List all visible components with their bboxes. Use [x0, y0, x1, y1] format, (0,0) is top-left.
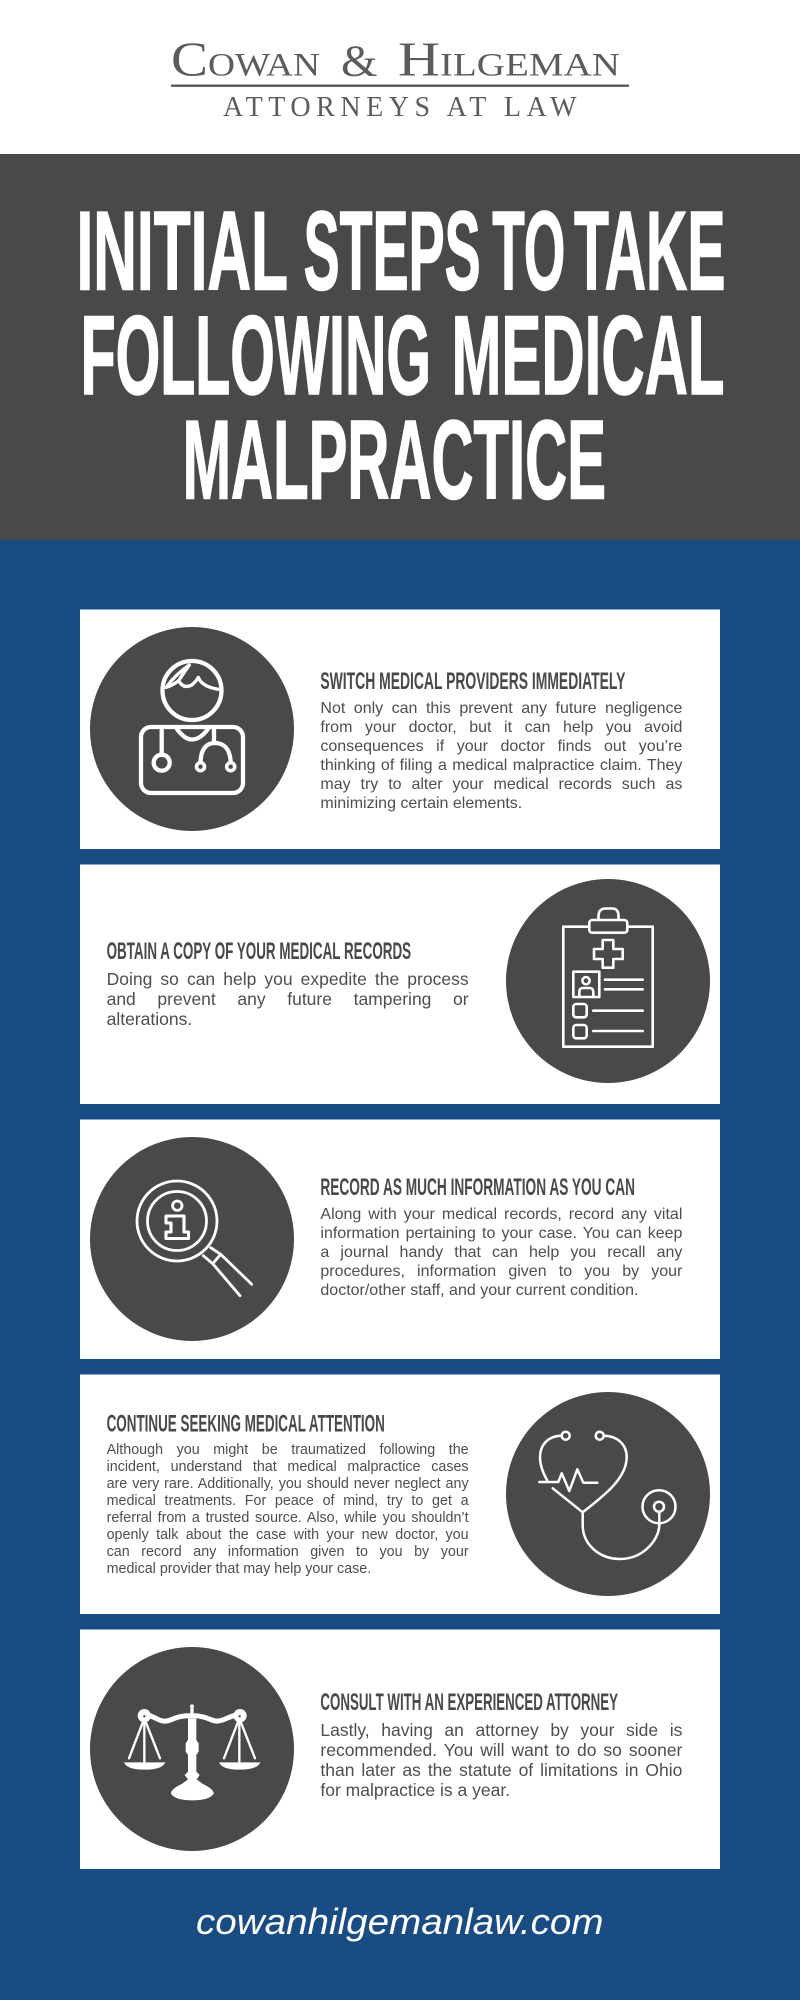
logo: Cowan & Hilgeman Attorneys at Law: &	[341, 36, 378, 86]
panel: consult an attorney	[80, 1629, 720, 1869]
body text: openly talk about the case with your new doctor, you	[107, 1526, 469, 1542]
title: Initial Steps to Take Following Medical Malpractice: FOLLOWING	[81, 293, 431, 418]
body text: referral from a trusted source. Also, while you shouldn’t	[107, 1510, 469, 1526]
logo: Cowan & Hilgeman Attorneys at Law	[171, 32, 629, 123]
body text: medical treatments. For peace of mind, try to get a	[107, 1492, 469, 1508]
icon: doctor	[90, 627, 294, 831]
body text: than later as the statute of limitations in Ohio	[320, 1760, 682, 1780]
title: Initial Steps to Take Following Medical Malpractice: STEPS	[304, 188, 481, 314]
body text: recommended. You will want to do so sooner	[320, 1740, 682, 1760]
body text: can record any information given to you by your	[107, 1544, 469, 1560]
body text: for malpractice is a year.	[320, 1780, 510, 1800]
body text: alterations.	[107, 1009, 192, 1029]
title band	[0, 154, 800, 540]
body text: Lastly, having an attorney by your side is	[320, 1720, 682, 1740]
body text: thinking of filing a medical malpractice claim. They	[320, 757, 682, 774]
body text: consequences if your doctor finds out you’re	[320, 738, 682, 755]
logo: Cowan & Hilgeman Attorneys at Law: HILGEMAN	[398, 32, 620, 86]
footer: website: cowanhilgemanlaw.com	[196, 1901, 604, 1942]
logo: Cowan & Hilgeman Attorneys at Law: ATTORNEYS AT LAW	[223, 92, 577, 123]
panel: obtain medical records	[80, 864, 720, 1104]
title: Initial Steps to Take Following Medical Malpractice	[76, 188, 726, 522]
logo: Cowan & Hilgeman Attorneys at Law: COWAN	[171, 32, 320, 86]
body text: Along with your medical records, record any vital	[320, 1206, 682, 1223]
body text: Although you might be traumatized following the	[107, 1442, 469, 1458]
heading: CONTINUE SEEKING MEDICAL ATTENTION	[107, 1411, 385, 1438]
body text: information pertaining to your case. You can keep	[320, 1225, 682, 1242]
heading: OBTAIN A COPY OF YOUR MEDICAL RECORDS	[107, 938, 411, 965]
body text	[107, 969, 469, 1029]
body text	[320, 700, 682, 812]
body text	[106, 1442, 469, 1576]
body text: minimizing certain elements.	[320, 795, 522, 812]
title: Initial Steps to Take Following Medical Malpractice: TO	[492, 188, 565, 314]
body text: and prevent any future tampering or	[107, 989, 469, 1009]
body text: medical provider that may help your case.	[107, 1560, 371, 1576]
header: logo band	[0, 0, 800, 154]
body text: are very rare. Additionally, you should never neglect any	[107, 1476, 469, 1492]
icon: scales of justice	[90, 1647, 294, 1851]
panel: record information	[80, 1119, 720, 1359]
icon: clipboard medical record	[506, 879, 710, 1083]
icon: stethoscope with heartbeat	[506, 1392, 710, 1596]
body text: incident, understand that medical malpractice cases	[107, 1458, 469, 1474]
body text	[320, 1206, 682, 1299]
body text: procedures, information given to you by your	[320, 1263, 682, 1280]
body text: doctor/other staff, and your current condition.	[320, 1282, 638, 1299]
panel: switch medical providers	[80, 609, 720, 849]
title: Initial Steps to Take Following Medical Malpractice: INITIAL	[76, 188, 288, 314]
body text	[320, 1720, 682, 1800]
body text: a journal handy that can help you recall any	[320, 1244, 682, 1261]
body text: Not only can this prevent any future negligence	[320, 700, 682, 717]
icon: magnifying glass with info	[90, 1137, 294, 1341]
panel: continue seeking attention	[80, 1374, 720, 1614]
body text: Doing so can help you expedite the process	[107, 969, 469, 989]
body text: from your doctor, but it can help you avoid	[320, 719, 682, 736]
body text: may try to alter your medical records such as	[320, 776, 682, 793]
